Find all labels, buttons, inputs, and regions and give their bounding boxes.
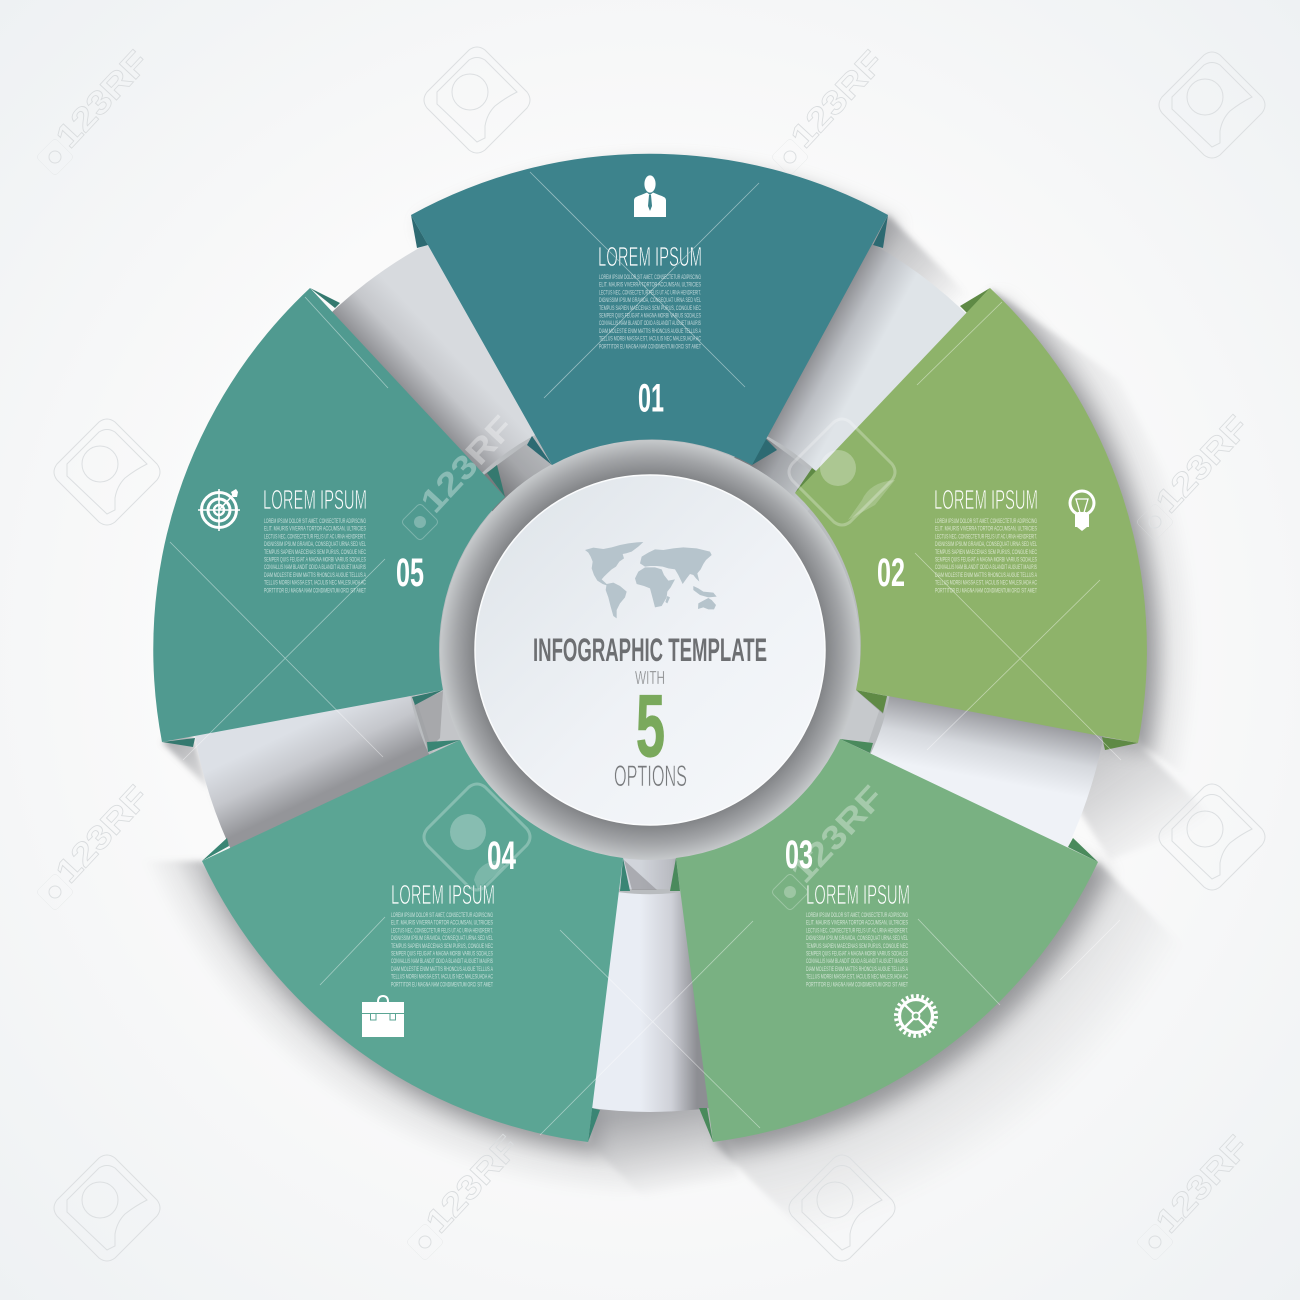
panel: hub ring [440,440,860,860]
text: segment 01 body: LECTUS NEC, CONSECTETUR FELIS UT AC URNA HENDRERIT. [599,289,701,296]
panel: grey connector bands [190,232,1110,1112]
text: with: WITH [635,668,665,688]
panel: outer shadows [120,163,1240,1290]
text: segment 03 body: LOREM IPSUM DOLOR SIT AMET, CONSECTETUR ADIPISCING [806,912,908,919]
text: segment 02 body: LOREM IPSUM DOLOR SIT AMET, CONSECTETUR ADIPISCING [935,518,1037,525]
text: segment 03 body [806,912,908,988]
panel: segment 02 [795,288,1147,743]
icon: world map [585,542,717,618]
watermark: background marks: 123RF [48,43,156,155]
text: segment 05 body: TELLUS MORBI MASSA EST, IACULIS NEC MALESUADA AC [264,580,366,587]
icon: briefcase [362,996,404,1037]
text: segment 01 body: TEMPUS SAPIEN MAECENAS SEM PURUS, CONGUE NEC [599,305,701,312]
text: segment 03 body: LECTUS NEC, CONSECTETUR FELIS UT AC URNA HENDRERIT. [806,927,908,934]
watermark: marks on segments [403,408,895,909]
text: segment 05 body: SEMPER QUIS FEUGIAT A MAGNA MORBI VARIUS SODALES [264,556,366,564]
text: segment 04 body: LECTUS NEC, CONSECTETUR FELIS UT AC URNA HENDRERIT. [391,927,493,934]
text: segment 02 body: DIAM MOLESTIE ENIM MATTIS RHONCUS AUGUE TELLUS A [935,572,1037,579]
text: segment 05 body: LOREM IPSUM DOLOR SIT AMET, CONSECTETUR ADIPISCING [264,518,366,525]
text: segment 03 body: CONVALLIS NAM BLANDIT ODIO A BLANDIT AUGUET MAURIS [806,958,908,965]
text: centre heading: INFOGRAPHIC TEMPLATE [533,632,767,668]
text: segment 04 body [391,912,493,988]
text: segment 03 body: PORTTITOR EU MAGNA NAM CONDIMENTUM ORCI SIT AMET [806,981,908,988]
text: segment 03 body: TEMPUS SAPIEN MAECENAS SEM PURUS, CONGUE NEC [806,943,908,950]
text: segment 05 body: ELIT. MAURIS VIVERRA TORTOR ACCUMSAN, ULTRICIES [264,526,366,533]
number: 05: 05 [396,551,424,595]
text: segment 03 title: LOREM IPSUM [806,879,910,910]
panel: centre circle [475,475,825,825]
text: segment 05 body: CONVALLIS NAM BLANDIT ODIO A BLANDIT AUGUET MAURIS [264,564,366,571]
text: segment 01 body: TELLUS MORBI MASSA EST, IACULIS NEC MALESUADA AC [599,336,701,343]
icon: light bulb [1068,490,1096,531]
text: segment 04 body: TELLUS MORBI MASSA EST, IACULIS NEC MALESUADA AC [391,974,493,981]
text: segment 02 body: LECTUS NEC, CONSECTETUR FELIS UT AC URNA HENDRERIT. [935,533,1037,540]
text: segment 01 body: CONVALLIS NAM BLANDIT ODIO A BLANDIT AUGUET MAURIS [599,320,701,327]
panel: segment 03 [676,739,1098,1142]
panel: segment 05 [153,288,505,742]
watermark: background marks: 123RF [1148,1128,1256,1240]
text: segment 01 body [599,274,701,350]
text: segment 02 body: PORTTITOR EU MAGNA NAM CONDIMENTUM ORCI SIT AMET [935,587,1037,594]
text: segment 01 body: DIAM MOLESTIE ENIM MATTIS RHONCUS AUGUE TELLUS A [599,328,701,335]
text: segment 04 body: PORTTITOR EU MAGNA NAM CONDIMENTUM ORCI SIT AMET [391,981,493,988]
watermark: background marks: 123RF [1148,408,1256,520]
number: 04: 04 [487,834,516,878]
text: segment 02 body: DIGNISSIM IPSUM GRAVIDA, CONSEQUAT URNA SED VEL [935,541,1037,548]
text: segment 03 body: SEMPER QUIS FEUGIAT A MAGNA MORBI VARIUS SODALES [806,950,908,958]
text: segment 05 body: TEMPUS SAPIEN MAECENAS SEM PURUS, CONGUE NEC [264,549,366,556]
text: segment 04 body: DIGNISSIM IPSUM GRAVIDA, CONSEQUAT URNA SED VEL [391,935,493,942]
watermark: thin crossing lines [170,172,1121,1135]
text: segment 04 body: TEMPUS SAPIEN MAECENAS SEM PURUS, CONGUE NEC [391,943,493,950]
text: segment 02 body: TEMPUS SAPIEN MAECENAS SEM PURUS, CONGUE NEC [935,549,1037,556]
icon: gear [896,996,936,1036]
text: segment 02 body: TELLUS MORBI MASSA EST, IACULIS NEC MALESUADA AC [935,580,1037,587]
watermark: background marks: 123RF [48,778,156,890]
text: segment 05 body: DIGNISSIM IPSUM GRAVIDA, CONSEQUAT URNA SED VEL [264,541,366,548]
text: segment 05 body: LECTUS NEC, CONSECTETUR FELIS UT AC URNA HENDRERIT. [264,533,366,540]
watermark: marks on segments: 123RF [413,408,521,520]
icon: target with arrow [198,489,240,531]
panel: segment 01 [411,154,888,465]
text: segment 04 body: SEMPER QUIS FEUGIAT A MAGNA MORBI VARIUS SODALES [391,950,493,958]
text: segment 01 body: ELIT. MAURIS VIVERRA TORTOR ACCUMSAN, ULTRICIES [599,282,701,289]
text: segment 04 body: CONVALLIS NAM BLANDIT ODIO A BLANDIT AUGUET MAURIS [391,958,493,965]
text: segment 02 body: ELIT. MAURIS VIVERRA TORTOR ACCUMSAN, ULTRICIES [935,526,1037,533]
watermark: marks on segments: 123RF [783,778,891,890]
text: segment 05 body: PORTTITOR EU MAGNA NAM CONDIMENTUM ORCI SIT AMET [264,587,366,594]
icon: businessman [634,175,666,217]
number: 01: 01 [638,376,664,420]
text: segment 01 body: PORTTITOR EU MAGNA NAM CONDIMENTUM ORCI SIT AMET [599,343,701,350]
text: segment 04 title: LOREM IPSUM [391,879,495,910]
text: segment 04 body: DIAM MOLESTIE ENIM MATTIS RHONCUS AUGUE TELLUS A [391,966,493,973]
panel: segment 04 [202,740,623,1142]
text: segment 04 body: ELIT. MAURIS VIVERRA TORTOR ACCUMSAN, ULTRICIES [391,920,493,927]
watermark: background marks: 123RF [418,1128,526,1240]
text: segment 02 body: SEMPER QUIS FEUGIAT A MAGNA MORBI VARIUS SODALES [935,556,1037,564]
text: segment 05 body [264,518,366,594]
text: segment 01 title: LOREM IPSUM [598,241,702,272]
text: segment 01 body: DIGNISSIM IPSUM GRAVIDA, CONSEQUAT URNA SED VEL [599,297,701,304]
number: 5: 5 [636,676,665,775]
text: segment 02 body: CONVALLIS NAM BLANDIT ODIO A BLANDIT AUGUET MAURIS [935,564,1037,571]
text: segment 03 body: TELLUS MORBI MASSA EST, IACULIS NEC MALESUADA AC [806,974,908,981]
text: segment 01 body: SEMPER QUIS FEUGIAT A MAGNA MORBI VARIUS SODALES [599,312,701,320]
text: segment 05 body: DIAM MOLESTIE ENIM MATTIS RHONCUS AUGUE TELLUS A [264,572,366,579]
text: segment 05 title: LOREM IPSUM [263,484,367,515]
text: segment 04 body: LOREM IPSUM DOLOR SIT AMET, CONSECTETUR ADIPISCING [391,912,493,919]
panel: paper fold triangles [162,215,1138,1142]
text: segment 01 body: LOREM IPSUM DOLOR SIT AMET, CONSECTETUR ADIPISCING [599,274,701,281]
text: segment 02 body [935,518,1037,594]
watermark: background marks: 123RF [783,43,891,155]
number: 02: 02 [877,551,905,595]
text: segment 03 body: DIAM MOLESTIE ENIM MATTIS RHONCUS AUGUE TELLUS A [806,966,908,973]
text: segment 02 title: LOREM IPSUM [934,484,1038,515]
text: segment 03 body: ELIT. MAURIS VIVERRA TORTOR ACCUMSAN, ULTRICIES [806,920,908,927]
number: 03: 03 [785,833,813,877]
text: segment 03 body: DIGNISSIM IPSUM GRAVIDA, CONSEQUAT URNA SED VEL [806,935,908,942]
text: options: OPTIONS [614,760,687,793]
